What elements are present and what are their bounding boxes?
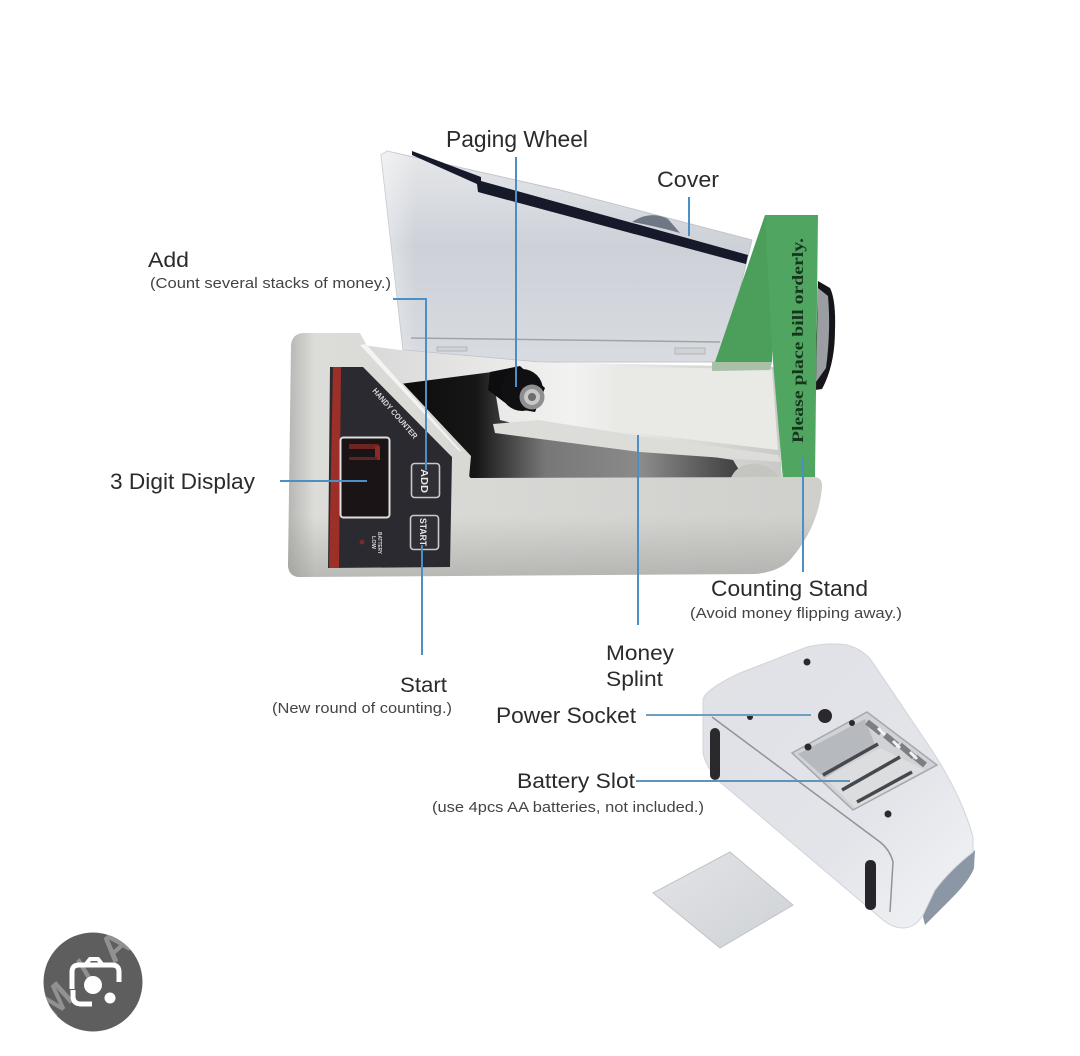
callout: battery slot	[432, 770, 850, 816]
callout: start: Start	[400, 674, 447, 697]
callout: counting stand: Counting Stand	[711, 576, 868, 601]
green counting stand	[712, 215, 818, 480]
callout: start: (New round of counting.)	[272, 700, 452, 717]
low battery indicator	[360, 532, 382, 555]
interior mechanism	[362, 345, 782, 480]
side slot right	[865, 860, 876, 910]
body seam	[712, 717, 893, 912]
battery cover plate	[653, 852, 793, 948]
callout: add: Add	[148, 249, 189, 272]
low battery indicator: BATTERY	[376, 532, 382, 555]
callout: cover: Cover	[657, 167, 719, 192]
paging wheel	[488, 366, 545, 412]
brand label: HANDY COUNTER	[370, 386, 419, 441]
roller	[730, 464, 780, 480]
black rear handle	[815, 281, 835, 390]
money splint	[493, 420, 781, 462]
badge watermark: M/A	[30, 922, 140, 1027]
rear body shell	[703, 644, 973, 928]
callout: money splint: Money	[606, 642, 675, 665]
add button	[412, 464, 440, 498]
gray end cap	[923, 850, 975, 925]
callout: money splint	[606, 435, 675, 691]
battery bay	[792, 712, 937, 810]
callout: start	[272, 545, 452, 717]
stand text: Please place bill orderly.	[790, 238, 807, 443]
callout: cover	[657, 167, 719, 236]
corner dot	[104, 992, 116, 1004]
callout: three digit display: 3 Digit Display	[110, 469, 255, 494]
camera icon	[72, 959, 119, 1004]
diagram canvas	[44, 130, 975, 1032]
start button	[410, 516, 438, 550]
callout: power socket: Power Socket	[496, 703, 636, 728]
callout: paging wheel: Paging Wheel	[446, 126, 588, 152]
callout: add: (Count several stacks of money.)	[150, 275, 391, 292]
callout: battery slot: (use 4pcs AA batteries, not included.)	[432, 799, 704, 816]
lens search badge	[44, 932, 142, 1032]
secondary device: rear view with battery bay	[653, 644, 975, 948]
callout: add	[148, 249, 426, 470]
callout: counting stand	[690, 458, 902, 622]
control panel	[328, 367, 452, 568]
device cover	[381, 151, 752, 362]
three digit display	[340, 438, 390, 518]
lens dot	[84, 976, 102, 994]
counter base body	[288, 333, 822, 577]
battery contacts	[878, 728, 917, 759]
callout: counting stand: (Avoid money flipping away.)	[690, 605, 902, 622]
side slot left	[710, 728, 720, 780]
callout: money splint: Splint	[606, 668, 663, 691]
low battery indicator: LOW	[370, 536, 376, 549]
main device: hand-held money counter	[288, 151, 835, 577]
start button: START	[417, 518, 428, 546]
add button: ADD	[418, 469, 429, 493]
callout: battery slot: Battery Slot	[517, 770, 635, 793]
screw holes and power socket	[747, 658, 892, 818]
